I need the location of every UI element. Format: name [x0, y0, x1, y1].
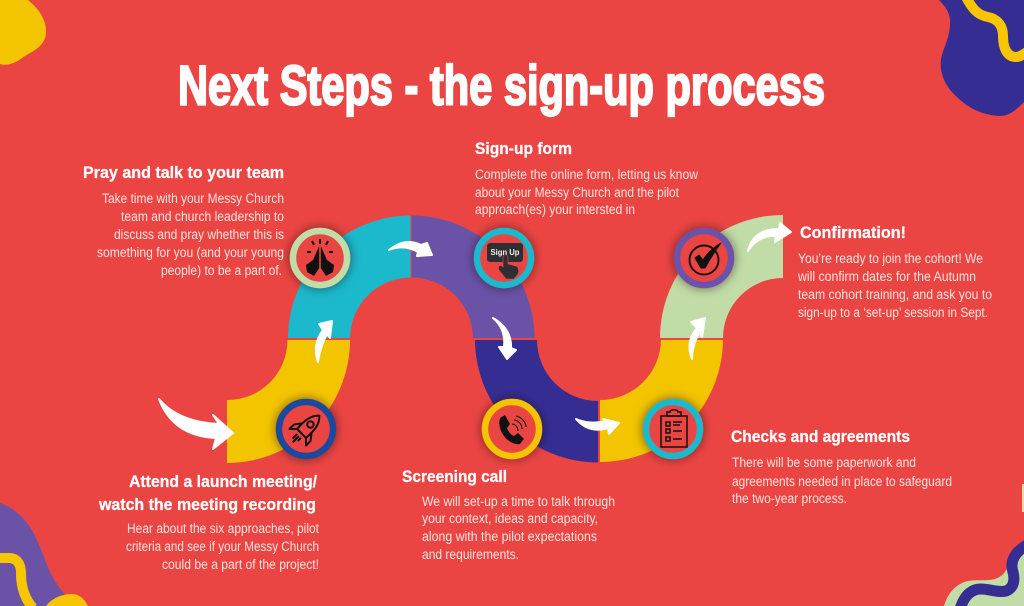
icon: clipboard badge	[646, 402, 700, 456]
body: sign-up form: approach(es) your intersted in	[475, 202, 635, 217]
heading: checks and agreements: Checks and agreements	[731, 428, 910, 446]
icon: check mark badge	[677, 231, 731, 285]
body: confirmation: team cohort training, and ask you to	[798, 287, 992, 302]
arrow: checks to confirmation	[689, 318, 705, 359]
ribbon: yellow launch segment	[227, 340, 350, 463]
title: Next Steps - the sign-up process	[178, 54, 825, 116]
heading: pray and talk: Pray and talk to your team	[83, 164, 284, 182]
arrow: sign-up to screening	[493, 318, 516, 359]
body: pray and talk: people) to be a part of.	[161, 263, 282, 278]
arrow: launch to pray	[316, 321, 332, 362]
heading: screening call: Screening call	[402, 468, 507, 486]
icon: praying hands badge	[293, 231, 347, 285]
body: screening call: along with the pilot expectations	[422, 529, 597, 544]
icon: sign up button badge	[477, 231, 531, 285]
body: attend a launch meeting: criteria and see if your Messy Church	[126, 539, 319, 554]
text block: confirmation	[797, 224, 992, 320]
body: pray and talk: Take time with your Messy Church	[102, 191, 284, 206]
blob: bottom right green with navy squiggle	[944, 484, 1024, 606]
body: pray and talk: something for you (and your young	[97, 245, 284, 260]
body: confirmation: You’re ready to join the cohort! We	[798, 251, 983, 266]
ribbon: purple sign-up segment	[412, 216, 534, 338]
text block: sign-up form	[475, 140, 698, 217]
icon: rocket badge	[279, 402, 333, 456]
body: pray and talk: team and church leadership to	[121, 209, 284, 224]
arrow: exit swoosh	[748, 223, 791, 251]
text block: screening call	[402, 468, 615, 562]
body: sign-up form: about your Messy Church and the pilot	[475, 185, 679, 200]
body: checks and agreements	[732, 455, 952, 506]
body: attend a launch meeting: could be a part of the project!	[162, 557, 319, 572]
heading: attend a launch meeting: Attend a launch meeting/	[129, 473, 317, 491]
body: confirmation: will confirm dates for the Autumn	[797, 269, 976, 284]
blob: top left yellow	[0, 0, 46, 65]
body: pray and talk: discuss and pray whether this is	[114, 227, 284, 242]
body: confirmation: sign-up to a ‘set-up’ session in Sept.	[798, 305, 988, 320]
body: attend a launch meeting	[126, 521, 319, 572]
body: checks and agreements: agreements needed in place to safeguard	[732, 474, 952, 489]
ribbon: green confirmation segment	[660, 215, 783, 338]
ribbon: navy screening segment	[475, 340, 598, 462]
heading: sign-up form: Sign-up form	[475, 140, 572, 158]
blob: bottom left purple with yellow squiggle	[0, 503, 88, 606]
body: screening call: your context, ideas and capacity,	[422, 511, 598, 526]
arrow: screening to checks	[576, 419, 619, 434]
heading: attend a launch meeting: watch the meeting recording	[98, 496, 316, 514]
body: checks and agreements: There will be some paperwork and	[732, 455, 916, 470]
body: screening call: and requirements.	[422, 547, 519, 562]
winding ribbon path	[227, 215, 783, 463]
body: pray and talk	[97, 191, 284, 278]
body: sign-up form: Complete the online form, letting us know	[475, 167, 698, 182]
icon: phone badge	[485, 402, 539, 456]
body: confirmation	[797, 251, 992, 320]
body: screening call: We will set-up a time to talk through	[422, 494, 615, 509]
body: attend a launch meeting: Hear about the six approaches, pilot	[127, 521, 319, 536]
body: sign-up form	[475, 167, 698, 217]
heading: attend a launch meeting	[98, 473, 317, 514]
text block: attend a launch meeting	[98, 473, 319, 572]
arrow: pray to sign-up	[389, 242, 432, 256]
icon: sign up button badge: Sign Up	[490, 247, 520, 257]
ribbon: yellow checks segment	[600, 340, 723, 462]
arrow: entry swoosh	[159, 399, 233, 449]
body: screening call	[422, 494, 615, 562]
ribbon: teal pray segment	[288, 216, 410, 338]
blob: top right navy with yellow squiggle	[939, 0, 1024, 116]
body: checks and agreements: the two-year process.	[732, 491, 847, 506]
text block: checks and agreements	[731, 428, 952, 506]
text block: pray and talk	[83, 164, 284, 278]
heading: confirmation: Confirmation!	[800, 224, 906, 242]
